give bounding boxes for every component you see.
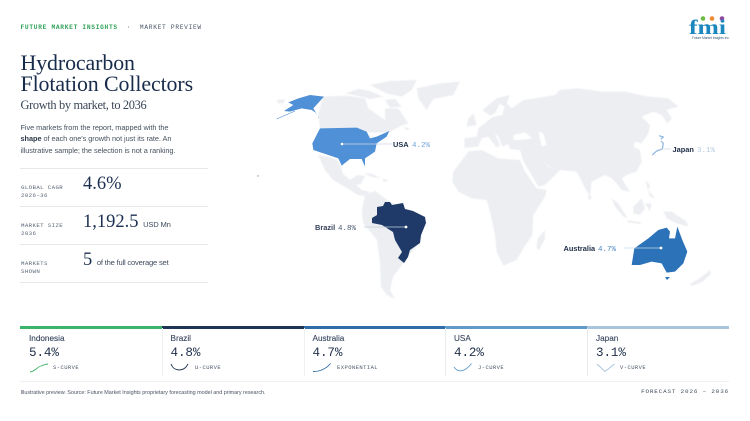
card: Japan: V-CURVE <box>620 364 646 371</box>
stat: markets shown: MARKETS <box>21 260 48 266</box>
callout: Brazil: 4.8% <box>338 225 357 233</box>
logo: fmi: Future Market Insights Inc. <box>692 36 730 40</box>
source note: Illustrative preview. Source: Future Market Insights proprietary forecasting model and primary research. <box>20 390 266 396</box>
title: Flotation Collectors <box>20 71 193 96</box>
card: Brazil <box>170 334 221 371</box>
stat: market size: 1,192.5 USD Mn <box>83 212 171 232</box>
callout: Australia: 4.7% <box>598 246 617 254</box>
card: Brazil: U-CURVE <box>195 364 221 371</box>
stat: global CAGR: 2026–36 <box>21 192 48 199</box>
stat: global CAGR: GLOBAL CAGR <box>21 184 63 191</box>
callout: Australia <box>564 244 662 254</box>
callout: USA: USA <box>393 140 409 149</box>
card: Australia: 4.7% <box>312 346 342 360</box>
stat: markets shown: 5 of the full coverage set <box>83 250 168 270</box>
callout: Japan <box>660 145 716 155</box>
card: Australia: Australia <box>312 334 344 343</box>
card bar: colour strips <box>20 326 729 328</box>
intro text: illustrative sample; the selection is not a ranking. <box>20 146 175 155</box>
card: Indonesia: 5.4% <box>29 346 59 360</box>
callout: Japan: 3.1% <box>697 147 716 155</box>
card: Japan: Japan <box>596 334 618 343</box>
base land masses <box>277 80 711 299</box>
card: Indonesia: Indonesia <box>29 334 65 343</box>
title <box>20 50 193 96</box>
title: Hydrocarbon <box>20 50 135 75</box>
country: Japan <box>652 136 663 155</box>
intro text: shape of each one's growth not just its rate. An <box>20 134 171 143</box>
card: Australia: EXPONENTIAL <box>337 364 378 371</box>
Hawaii dot <box>257 175 259 177</box>
card: Japan <box>596 334 646 372</box>
stat: markets shown <box>21 250 169 275</box>
card: Indonesia: S-CURVE <box>53 364 79 371</box>
callout: USA <box>341 140 431 150</box>
stat: global CAGR <box>21 174 122 199</box>
stat: market size <box>21 212 171 237</box>
card: Australia <box>312 334 378 372</box>
card: USA: USA <box>454 334 471 343</box>
logo: fmi: fmi <box>689 15 726 39</box>
card: USA <box>454 334 504 372</box>
stat: global CAGR: 4.6% <box>83 174 122 194</box>
country: Tasmania <box>665 277 670 280</box>
card: Brazil: Brazil <box>170 334 191 343</box>
stat: market size: 2036 <box>21 230 36 237</box>
card: USA: 4.2% <box>454 346 484 360</box>
callout: Brazil: Brazil <box>315 223 335 232</box>
card: USA: J-CURVE <box>478 364 504 371</box>
card: Brazil: 4.8% <box>170 346 200 360</box>
intro text <box>20 123 175 155</box>
callout: Brazil <box>315 223 407 233</box>
country: Brazil <box>372 202 426 263</box>
stat: market size: MARKET SIZE <box>21 222 63 228</box>
card: Japan: 3.1% <box>596 346 626 360</box>
card: Indonesia <box>29 334 79 372</box>
stat: markets shown: SHOWN <box>21 268 40 275</box>
country: USA <box>277 95 389 167</box>
callout: Australia: Australia <box>564 244 596 253</box>
callout: Japan: Japan <box>672 145 694 154</box>
subtitle: Growth by market, to 2036 <box>20 98 146 112</box>
eyebrow header: FUTURE MARKET INSIGHTS · MARKET PREVIEW <box>20 24 202 30</box>
intro text: Five markets from the report, mapped with the <box>20 123 168 132</box>
callout: USA: 4.2% <box>412 142 431 150</box>
forecast label: FORECAST 2026 – 2036 <box>641 388 729 395</box>
country: Australia <box>632 227 687 273</box>
